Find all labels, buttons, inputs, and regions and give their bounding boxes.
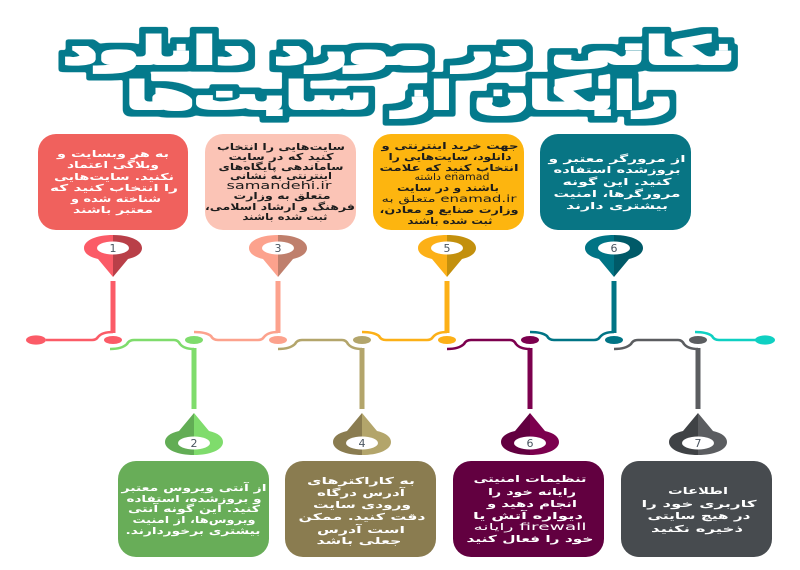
step 2	[110, 336, 269, 557]
card 6 top text: از مرورگر معتبر و	[547, 153, 686, 165]
card 2 text: و بروزشده، استفاده	[126, 494, 262, 505]
card 4	[285, 461, 436, 557]
card 2 text: کنید. این گونه آنتی	[128, 502, 261, 515]
pin 1	[84, 235, 142, 277]
pin 5	[418, 235, 476, 277]
card 6 top text: بروزشده استفاده	[554, 165, 680, 176]
pin 7	[669, 413, 727, 455]
card 6 top text	[547, 153, 686, 212]
card 5 text: وزارت صنایع و معادن،	[380, 205, 519, 216]
card 2 text: بیشتری برخوردارند.	[126, 526, 260, 537]
card 3 text: اینترنتی به نشانی	[230, 171, 332, 182]
card 4 text	[298, 476, 426, 547]
card 5 text: انتخاب کنید که علامت	[380, 163, 518, 174]
card 3 text: samandehi.ir	[226, 179, 332, 192]
pin 3: 3	[274, 242, 282, 255]
card 7 text: ذخیره نکنید	[651, 524, 743, 535]
title: رایگان از سایت‌ها	[126, 75, 672, 117]
card 4 text: دقت کنید. ممکن	[298, 512, 426, 523]
card 7 text: در هیچ سایتی	[648, 511, 751, 522]
step 5	[362, 134, 524, 344]
card 6 bottom text: خود را فعال کنید	[466, 534, 594, 545]
card 1 text: نکنید. سایت‌هایی	[54, 172, 174, 183]
step 7	[614, 336, 772, 557]
card 5 text: باشند و در سایت	[397, 183, 499, 194]
card 4 text: به کاراکترهای	[307, 476, 415, 487]
pin 1: 1	[110, 242, 116, 255]
card 3 text: فرهنگ و ارشاد اسلامی،	[205, 201, 355, 213]
card 5	[373, 134, 524, 230]
pin 5: 5	[444, 242, 450, 255]
pin number 2: 2	[190, 437, 198, 450]
card 1 text: را انتخاب کنید که	[50, 183, 178, 194]
card 7 text: اطلاعات	[668, 486, 728, 497]
card 6 bottom text	[466, 474, 594, 545]
pin 4	[333, 413, 391, 455]
card 6 top text: بیشتری دارند	[566, 201, 668, 212]
card 1 text	[50, 149, 178, 216]
pin number 6 bottom: 6	[526, 437, 534, 450]
timeline start dot	[26, 335, 46, 345]
card 1 text: به هر وبسایت و	[55, 149, 169, 160]
step 4	[278, 336, 436, 557]
card 6 top text: کنید. این گونه	[562, 176, 672, 188]
connector 3	[194, 281, 287, 344]
card 6 bottom text: رایانه خود را	[488, 487, 576, 498]
card 6 bottom text: دیواره آتش یا	[473, 509, 583, 522]
step 6 bottom	[447, 336, 604, 557]
card 5 text	[380, 141, 519, 227]
pin 2	[165, 413, 223, 455]
connector 6 top	[530, 281, 623, 344]
pin 6 top	[585, 235, 643, 277]
timeline end dot	[755, 335, 775, 345]
card 7 text: کاربری خود را	[642, 499, 757, 510]
pin 6 bottom	[501, 413, 559, 455]
card 3 text	[205, 142, 355, 223]
card 6 top	[540, 134, 691, 230]
card 3 text: ساماندهی پایگاه‌های	[218, 161, 344, 173]
card 4 text: جعلی باشد	[316, 536, 402, 547]
step 3	[194, 134, 356, 344]
card 5 text: enamad داشته	[414, 172, 490, 183]
card 6 bottom	[453, 461, 604, 557]
connector 2	[110, 336, 203, 409]
card 5 text: دانلود، سایت‌هایی را	[388, 152, 512, 163]
pin number 7: 7	[694, 437, 702, 450]
step 1	[38, 134, 188, 344]
card 3 text: ثبت شده باشند	[242, 212, 328, 223]
card 6 top text: مرورگرها، امنیت	[554, 188, 681, 200]
card 1 text: شناخته شده و	[70, 194, 161, 205]
final connector to end dot	[695, 332, 756, 340]
connector 1	[46, 281, 122, 344]
card 3 text: سایت‌هایی را انتخاب	[217, 142, 345, 153]
card 5 text: جهت خرید اینترنتی و	[380, 141, 518, 152]
pin 6 top: 6	[610, 242, 618, 255]
connector 5	[362, 281, 456, 344]
card 5 text: ثبت شده باشند	[408, 216, 492, 227]
card 4 text: است آدرس	[317, 523, 405, 536]
card 5 text: enamad.ir متعلق به	[382, 194, 517, 205]
card 1 text: معتبر باشند	[73, 205, 153, 216]
title	[63, 31, 735, 117]
connector 4	[278, 336, 371, 409]
card 4 text: ورودی سایت	[313, 500, 411, 511]
card 2 text	[120, 481, 266, 537]
card 4 text: آدرس درگاه	[317, 486, 406, 499]
card 3 text: متعلق به وزارت	[234, 191, 331, 202]
card 2	[118, 461, 269, 557]
pin number 4: 4	[358, 437, 366, 450]
card 1 text: وبلاگی اعتماد	[67, 159, 159, 171]
step 6 top	[530, 134, 691, 344]
title: نکاتی در مورد دانلود	[63, 31, 735, 72]
card 6 bottom text: تنظیمات امنیتی	[474, 474, 586, 485]
card 6 bottom text: firewall رایانه	[474, 522, 586, 533]
card 7	[621, 461, 772, 557]
card 1	[38, 134, 188, 230]
card 6 bottom text: انجام دهید و	[485, 499, 577, 510]
card 3 text: کنید که در سایت	[228, 152, 334, 163]
pin 3	[249, 235, 307, 277]
connector 7	[614, 336, 707, 409]
connector 6 bottom	[447, 336, 539, 409]
card 2 text: از آنتی ویروس معتبر	[120, 481, 266, 494]
card 7 text	[642, 486, 757, 535]
card 2 text: ویروس‌ها، از امنیت	[132, 515, 256, 526]
card 3	[205, 134, 356, 230]
